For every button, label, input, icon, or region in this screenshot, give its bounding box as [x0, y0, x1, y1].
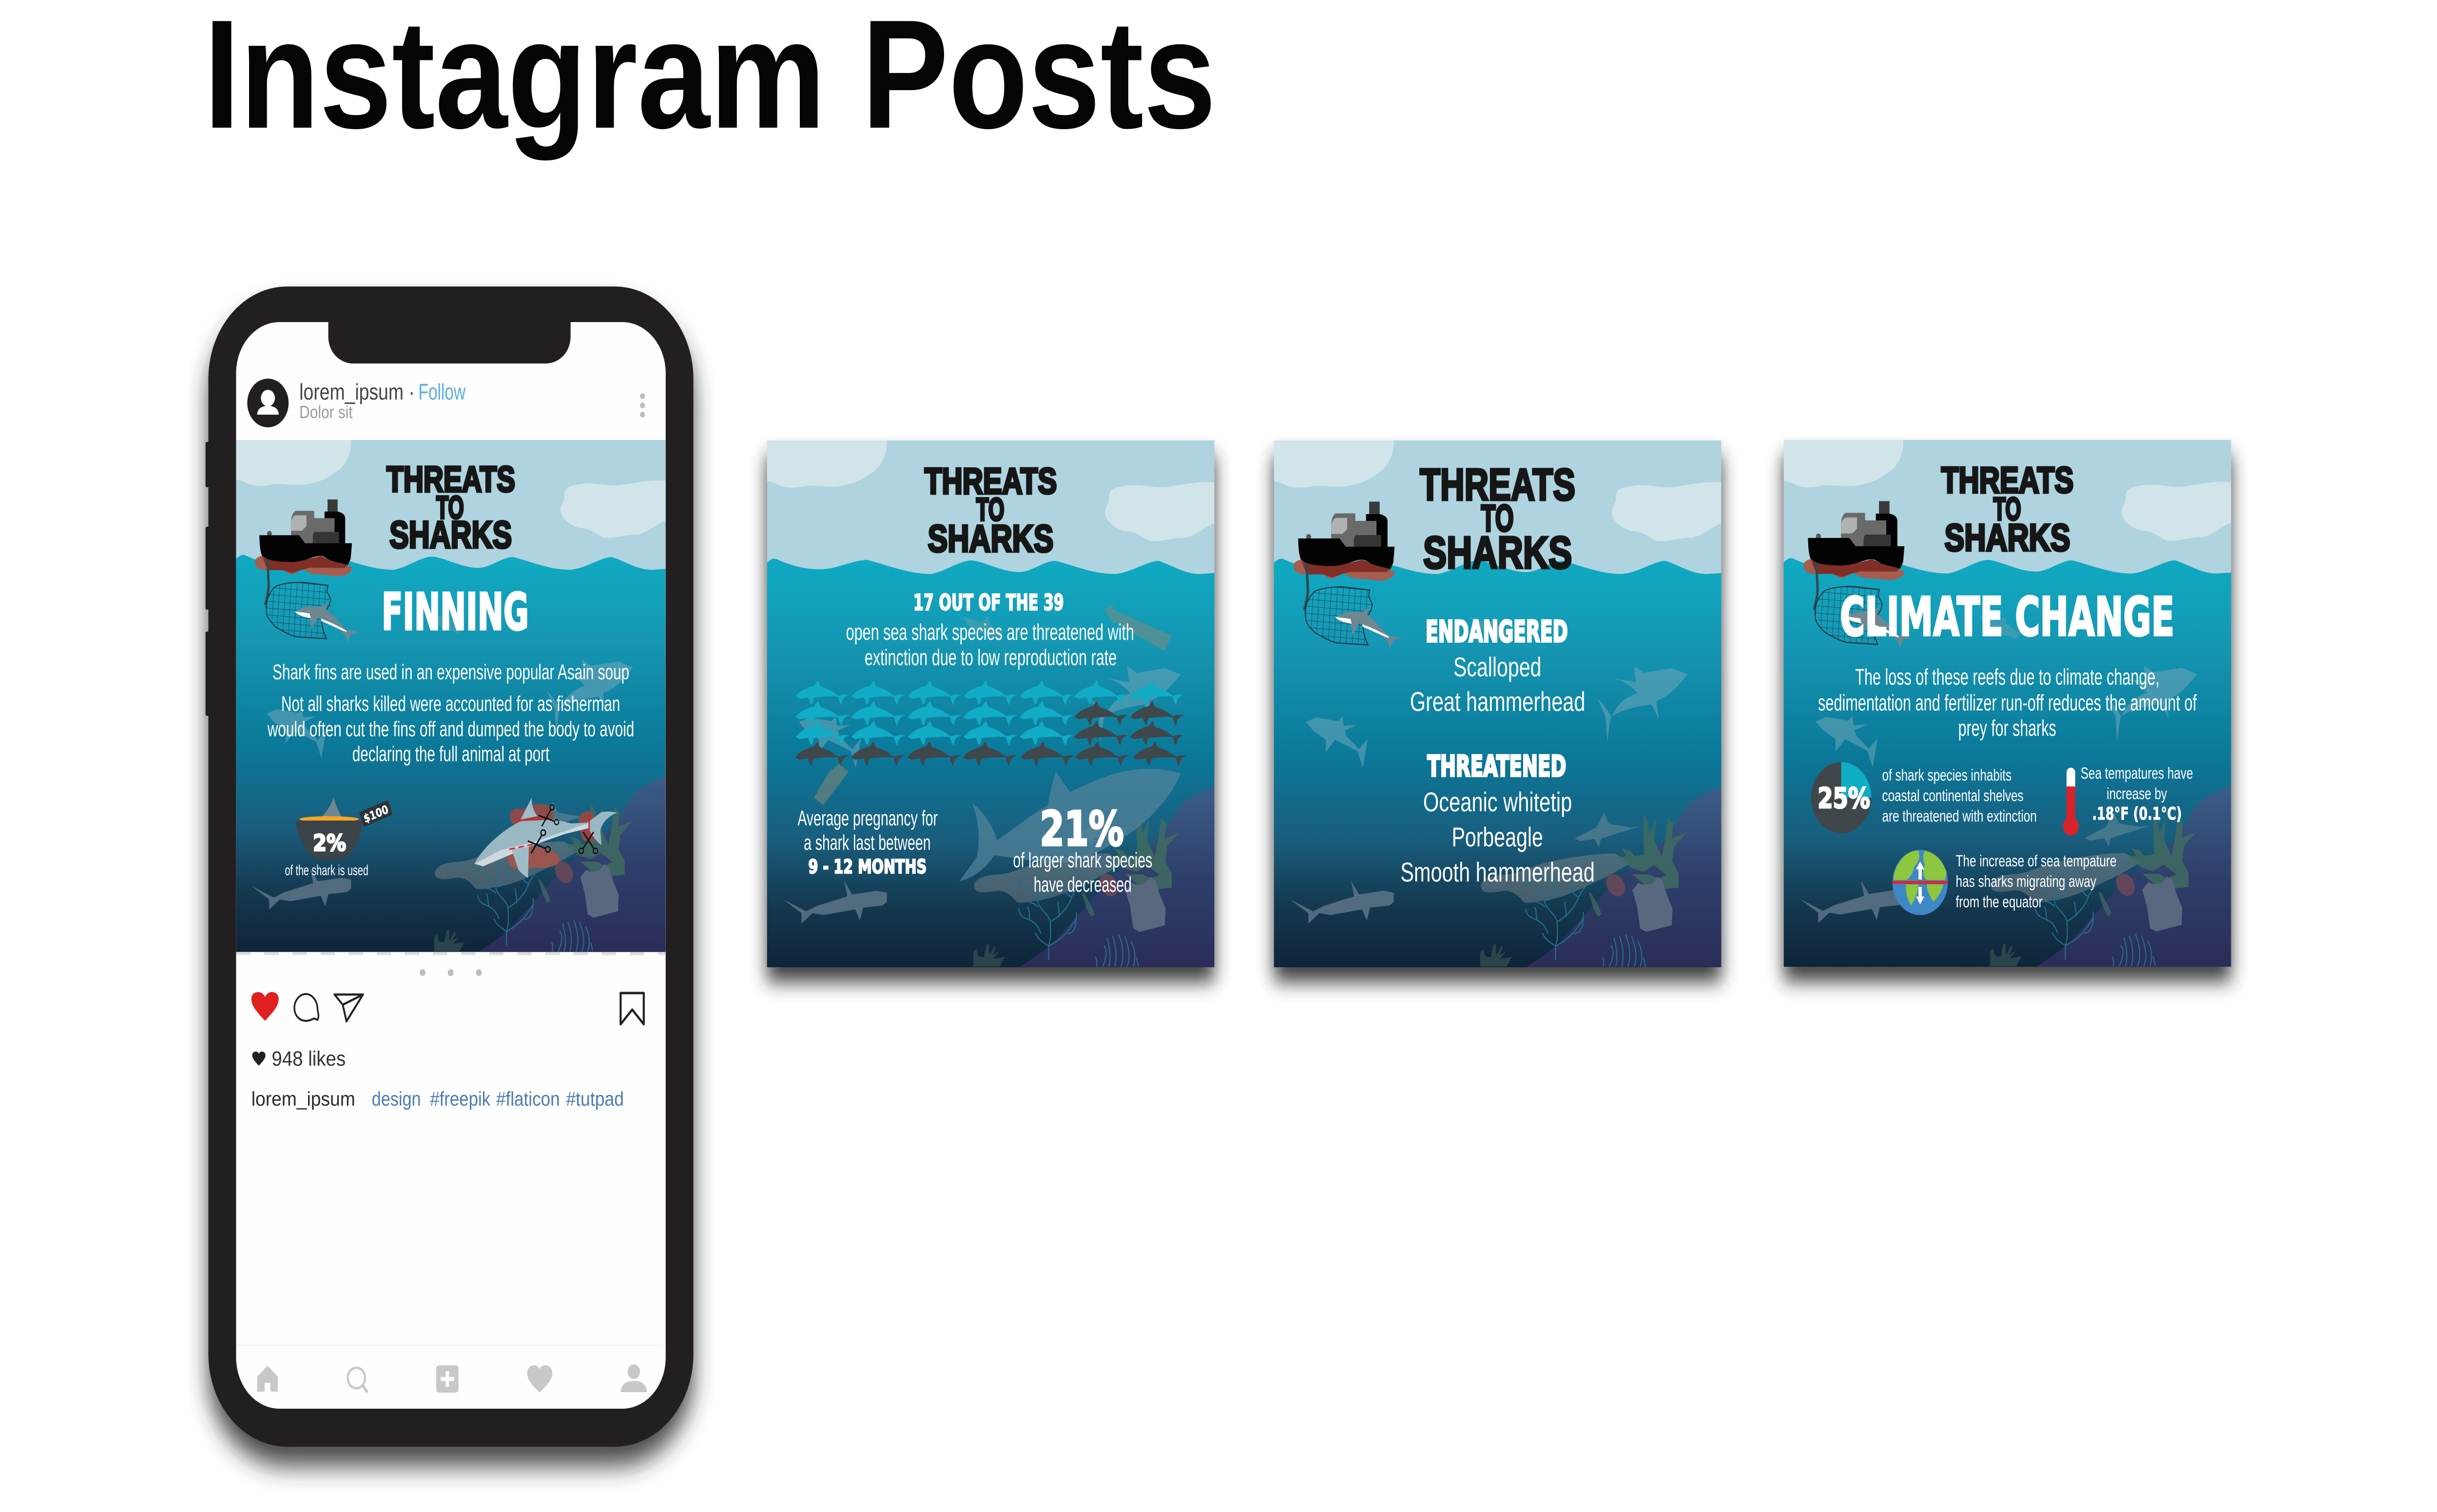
list: threatened species: Porbeagle	[1451, 822, 1543, 853]
text: pregnancy length	[797, 806, 938, 878]
body text: would often cut the fins off and dumped the body to avoid	[267, 717, 634, 741]
text: coastal shelves	[1882, 766, 2037, 825]
body text	[846, 620, 1134, 670]
carousel dots	[420, 969, 482, 976]
heading: threatened: THREATENED	[1427, 749, 1566, 784]
text: sea temperature	[2081, 765, 2193, 824]
body text: declaring the full animal at port	[352, 742, 550, 766]
caption: design	[372, 1088, 421, 1110]
post separator	[236, 952, 666, 955]
likes: 948 likes	[271, 1047, 346, 1071]
username and follow: Follow	[419, 380, 465, 405]
list: endangered species	[1410, 652, 1585, 717]
text: larger shark decline	[1013, 848, 1152, 897]
ocean scene	[1274, 440, 1721, 967]
icon: add	[436, 1365, 459, 1393]
icon: search	[348, 1368, 367, 1393]
illustration: finned shark with scissors	[474, 798, 618, 878]
list: endangered species: Great hammerhead	[1410, 687, 1585, 717]
panel: reproduction	[767, 440, 1215, 982]
icon: globe	[1893, 850, 1948, 915]
text: coastal shelves: of shark species inhabits	[1882, 766, 2011, 785]
text: migration: The increase of sea tempature	[1956, 852, 2117, 870]
icon: comment	[294, 994, 318, 1021]
text: migration	[1956, 852, 2117, 911]
text: coastal shelves: coastal continental shelves	[1882, 787, 2024, 805]
caption	[251, 1088, 624, 1110]
list: threatened species: Smooth hammerhead	[1400, 857, 1595, 888]
heading: threats to sharks: THREATS	[925, 460, 1057, 501]
icon: bookmark	[620, 993, 644, 1024]
caption: lorem_ipsum	[251, 1088, 355, 1110]
ship and net	[255, 499, 360, 642]
heading: threats to sharks: SHARKS	[389, 514, 512, 556]
panel shadow	[767, 455, 1215, 982]
heading: threats to sharks: TO	[1993, 491, 2021, 527]
icon: soup bowl with 2 percent: $100	[362, 803, 390, 826]
heading: threats to sharks: TO	[436, 490, 464, 525]
caption: #tutpad	[566, 1088, 624, 1110]
body text: sedimentation and fertilizer run-off reduces the amount of	[1818, 690, 2197, 716]
phone side buttons	[206, 442, 211, 716]
caption: #flaticon	[496, 1088, 560, 1110]
body text	[267, 660, 634, 766]
chart: shark pictogram	[795, 681, 1187, 766]
stat: 17 out of the 39: 17 OUT OF THE 39	[913, 590, 1064, 615]
icon: send	[334, 995, 363, 1021]
heading: threats to sharks: THREATS	[1941, 459, 2073, 500]
username and follow	[299, 380, 465, 405]
text: migration: has sharks migrating away	[1956, 873, 2097, 891]
text: sea temperature: Sea tempatures have	[2081, 765, 2193, 783]
phone shadow	[209, 306, 694, 1466]
icon: soup bowl with 2 percent: 2%	[313, 830, 346, 857]
panel: climate change	[1784, 440, 2231, 981]
heading: threats to sharks	[1420, 460, 1575, 578]
bottom nav bar	[236, 1345, 666, 1393]
heading: threats to sharks	[1941, 459, 2073, 559]
icon: soup bowl with 2 percent	[296, 797, 392, 860]
heading: threats to sharks: TO	[1481, 498, 1514, 539]
text: pregnancy length: a shark last between	[804, 830, 931, 855]
icon: nav heart	[527, 1365, 552, 1393]
body text: Shark fins are used in an expensive popular Asain soup	[272, 660, 629, 684]
heading: endangered: ENDANGERED	[1426, 614, 1568, 649]
caption: #freepik	[430, 1088, 491, 1110]
ship and net	[1803, 501, 1913, 648]
stat: 21 percent: 21%	[1040, 802, 1124, 857]
text: migration: from the equator	[1956, 893, 2043, 911]
text: coastal shelves: are threatened with extinction	[1882, 807, 2037, 825]
heading: threats to sharks: SHARKS	[928, 518, 1054, 560]
notch	[329, 317, 571, 364]
heading: threats to sharks: SHARKS	[1423, 528, 1572, 578]
phone screen	[236, 322, 666, 1409]
body text: The loss of these reefs due to climate change,	[1855, 665, 2160, 690]
ocean scene	[1784, 440, 2231, 967]
panel shadow	[1784, 455, 2231, 981]
body text: prey for sharks	[1958, 716, 2056, 741]
list: endangered species: Scalloped	[1453, 652, 1542, 683]
ocean scene	[236, 440, 666, 952]
text: pregnancy length: 9 - 12 MONTHS	[808, 855, 927, 878]
list: threatened species: Oceanic whitetip	[1423, 787, 1572, 818]
phone body	[209, 287, 694, 1447]
icon: home	[257, 1366, 278, 1392]
heading: finning: FINNING	[382, 582, 529, 642]
username and follow: ·	[408, 380, 415, 405]
heading: threats to sharks	[387, 459, 515, 556]
icon: thermometer	[2063, 768, 2079, 836]
post: finning	[236, 440, 666, 952]
text: pregnancy length: Average pregnancy for	[797, 806, 938, 830]
username and follow: lorem_ipsum	[299, 380, 404, 405]
panel: species	[1274, 440, 1721, 982]
panel shadow	[1274, 455, 1721, 982]
body text: open sea shark species are threatened with	[846, 620, 1134, 645]
body text	[1818, 665, 2197, 741]
avatar icon	[247, 379, 289, 427]
icon: profile	[620, 1364, 647, 1392]
icon: red heart	[251, 992, 279, 1021]
heading: threats to sharks: THREATS	[387, 459, 515, 499]
phone mockup	[206, 287, 694, 1466]
ocean scene	[767, 440, 1215, 967]
body text: extinction due to low reproduction rate	[865, 645, 1117, 670]
chart: 25 percent pie: 25%	[1818, 782, 1870, 815]
ship and net	[1294, 502, 1403, 649]
text: larger shark decline: have decreased	[1034, 872, 1132, 897]
menu dots	[640, 393, 645, 418]
heading: threats to sharks: THREATS	[1420, 460, 1575, 510]
heading: threats to sharks	[925, 460, 1057, 560]
text: sea temperature: increase by	[2107, 785, 2167, 803]
caption: 2 percent used: of the shark is used	[285, 862, 368, 878]
text: larger shark decline: of larger shark species	[1013, 848, 1152, 872]
location text: Dolor sit	[299, 403, 353, 422]
heading: climate change: CLIMATE CHANGE	[1840, 586, 2174, 649]
text: sea temperature: .18°F (0.1°C)	[2092, 804, 2182, 824]
heading: threats to sharks: SHARKS	[1945, 517, 2070, 559]
body text: Not all sharks killed were accounted for as fisherman	[281, 691, 620, 716]
chart: 25 percent pie	[1811, 762, 1871, 833]
list: threatened species	[1400, 787, 1595, 888]
heading: threats to sharks: TO	[976, 492, 1005, 527]
